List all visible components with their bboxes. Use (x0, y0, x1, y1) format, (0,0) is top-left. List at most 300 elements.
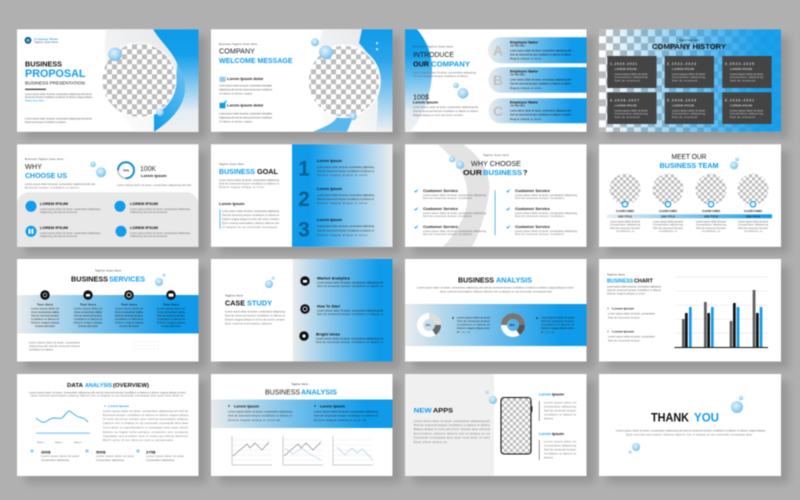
stat: 100$ (413, 94, 429, 101)
bar chart (674, 277, 768, 348)
service 3: Ut enim ad minim (119, 324, 140, 328)
goal 3: Lorem Ipsum (317, 218, 342, 222)
member 4: Incididunt ut (744, 229, 762, 233)
member 1: Sed do eiusmod tempor (610, 226, 640, 230)
member 3: CLAUDE CAINES (702, 210, 720, 213)
heading (607, 272, 662, 296)
heading: BUSINESS (265, 390, 300, 397)
item 1: Sed do eiusmod tempor (544, 408, 576, 412)
heading: BUSINESS (458, 278, 494, 284)
right list: Lorem ipsum dolor sit amet, consectetur adipiscing (515, 193, 578, 197)
heading: COMPANY (219, 48, 255, 55)
stat 100K: Lorem Ipsum (141, 174, 167, 178)
service 1 (31, 290, 60, 328)
heading: WELCOME MESSAGE (219, 58, 293, 65)
heading (414, 408, 490, 444)
heading: Sed do eiusmod tempor incididunt ut labore et dolore (414, 423, 490, 427)
item: market analytics: Market Analytics (317, 276, 350, 280)
text block: Eiusmod tempor incididunt ut labore (25, 120, 66, 124)
heading: APPS (433, 408, 454, 414)
stat 3 (136, 450, 184, 462)
left list (414, 189, 486, 236)
icon: spheres (108, 48, 164, 116)
heading (463, 153, 528, 177)
heading: CASE (225, 298, 245, 308)
heading: CHART (634, 278, 654, 284)
line chart (36, 411, 90, 444)
goal 2: Lorem ipsum dolor sit amet, consectetur adipiscing (317, 193, 374, 197)
employee row A (488, 37, 586, 63)
service 3: Lorem ipsum dolor sit (115, 306, 143, 310)
heading: Dolore magna aliqua ut enim (219, 185, 265, 189)
text block (25, 92, 92, 124)
heading: Commodo consequat duis aute irure dolor in velit (414, 436, 490, 440)
item 1: Lorem Ipsum dolor (227, 77, 264, 81)
heading: BUSINESS (219, 169, 255, 176)
box 2020: LOREM IPSUM (614, 67, 637, 71)
service 1: Sed do eiusmod tempor (31, 314, 59, 318)
right list: Sed do eiusmod tempor incididunt (515, 214, 564, 218)
heading: Magna aliqua ut enim ad minim veniam quis nostrud (414, 427, 490, 431)
point 2: Sed do eiusmod tempor incididunt ut labore et (314, 414, 378, 418)
blue divider (494, 190, 496, 235)
service 1: Incididunt ut labore et (31, 317, 59, 321)
text block (29, 340, 80, 352)
donut 2 (504, 316, 522, 334)
box 2030: Lorem ipsum dolor sit amet (730, 108, 763, 112)
stat (413, 94, 478, 117)
stat: Sed do eiusmod tempor incididunt ut labore et dolore (413, 109, 478, 113)
text block (103, 404, 189, 442)
box 2022: 2.2022-2023 (667, 62, 696, 66)
heading (417, 278, 575, 294)
logo: Tagline Goes Here (34, 40, 59, 44)
item 1: Lorem ipsum dolor sit (544, 400, 576, 404)
line chart: Series 2 (55, 442, 63, 444)
member 2: Sed do eiusmod tempor (653, 226, 683, 230)
icon: spheres (311, 38, 378, 120)
point 1: Sed do eiusmod tempor incididunt ut labore et (228, 414, 292, 418)
service 4: Ut enim ad minim (161, 324, 182, 328)
goal 2: Dolore magna aliqua ut enim (317, 201, 368, 205)
list item 3: Lorem ipsum dolor sit amet, consectetur adipiscing (40, 231, 100, 235)
service 1: Text Here (37, 302, 53, 306)
text block: Dolore eu fugiat nulla pariatur excepteur sint occaecat (103, 430, 188, 434)
heading: Lorem ipsum dolor sit amet, consectetur adipiscing (219, 178, 280, 182)
box 2028 (665, 92, 714, 124)
text block: Read more here (25, 98, 44, 102)
list item 2 (114, 201, 190, 214)
employee row A: Employee Name (510, 41, 538, 45)
box 2020 (607, 56, 657, 88)
box 2026: 4.2026-2027 (610, 98, 639, 102)
phone mockup (501, 398, 532, 454)
bullet 2: Lorem Ipsum (612, 330, 634, 334)
item 2: Lorem ipsum dolor sit (544, 440, 576, 444)
decorative left shape (405, 29, 432, 132)
box 2022: LOREM IPSUM (672, 67, 694, 71)
list item 3 (26, 226, 100, 238)
donut 75%: 75% (123, 169, 129, 173)
service 2: Sed do eiusmod tempor (74, 314, 102, 318)
text block: Irure dolor in reprehenderit in voluptate velit esse cillum (103, 426, 189, 430)
logo (25, 37, 59, 44)
heading (29, 383, 187, 398)
gradient band (17, 295, 198, 334)
service 3: Incididunt ut labore et (115, 317, 143, 321)
point 2: Lorem ipsum dolor sit amet, consectetur adipiscing (314, 410, 378, 414)
member 1: Consectetur adipiscing (610, 223, 640, 227)
point 1: Lorem Ipsum (234, 404, 259, 408)
right list: Lorem ipsum dolor sit amet, consectetur adipiscing (515, 229, 578, 233)
bullet 2 (607, 330, 655, 342)
goal 3: Dolore magna aliqua ut enim (317, 233, 368, 237)
title: BUSINESS TEAM (660, 161, 718, 170)
goal 2: Sed do eiusmod tempor incididunt ut labore et (317, 197, 374, 201)
stat 100K (117, 166, 192, 187)
heading: ANALYSIS (85, 383, 112, 389)
heading: GOAL (257, 169, 279, 176)
box 2024 (722, 56, 772, 88)
item: how to start: How To Start (317, 304, 341, 308)
member 2: CLAUDE CAINES (659, 210, 677, 213)
box 2026 (607, 92, 657, 124)
box 2030: 6.2030-2031 (725, 98, 754, 102)
panel: slide 4 company history (599, 29, 789, 139)
title (25, 61, 86, 90)
item 2: Lorem ipsum dolor sit amet, consectetur elit adipis (219, 111, 273, 115)
employee row A: Job Title Here (510, 44, 526, 48)
service 1: Ut enim ad minim (35, 324, 56, 328)
employee row C: C (493, 103, 503, 119)
left list: Lorem ipsum dolor sit amet, consectetur adipiscing (423, 193, 486, 197)
heading: Tagline Here... (292, 382, 311, 386)
line chart 2 (283, 436, 323, 465)
list item 4 (116, 226, 190, 238)
dot grid (133, 342, 158, 349)
goal 2: 2 (298, 188, 310, 211)
line chart: Series 3 (74, 442, 82, 444)
employee row B: Employee Name (510, 69, 538, 73)
text block with blue rule: Ut aliquip ex ea commodo consequat (222, 225, 277, 229)
stat: Lorem ipsum dolor sit amet, consectetur adipiscing elit (413, 105, 478, 109)
box 2020: Lorem ipsum dolor sit amet (614, 72, 648, 76)
heading: Lorem ipsum dolor sit amet, consectetur adipiscing elit sed (25, 182, 96, 186)
heading: NEW (414, 408, 433, 414)
item 2: Lorem Ipsum dolor (227, 103, 264, 107)
employee row B: Job Title Here (510, 72, 526, 76)
decorative gray and blue waves (105, 29, 198, 132)
member 3: JOB TITLE (704, 216, 718, 218)
heading: Business Tagline Goes Here (413, 44, 454, 48)
left list: Sed do eiusmod tempor incididunt (423, 232, 472, 236)
gradient side panel (293, 259, 392, 362)
service 2: Amet consectetur adipis (74, 310, 103, 314)
text 2 (536, 316, 575, 334)
goal 1: Lorem Ipsum (317, 159, 342, 163)
heading (265, 382, 337, 397)
item 1: Incididunt ut labore et (544, 412, 576, 416)
title: PROPOSAL (25, 68, 86, 80)
text block: Lorem ipsum dolor sit amet, consectetur adipiscing elit sed do (103, 409, 188, 413)
text 2: Incididunt ut labore et (541, 322, 574, 326)
text block: Lorem ipsum dolor sit amet, consectetur adipiscing elit sed do (25, 116, 92, 120)
text 1: Lorem ipsum dolor sit amet (457, 316, 490, 320)
heading (219, 162, 280, 189)
heading: OUR (463, 168, 483, 177)
heading: DATA (67, 383, 83, 389)
stat 1: Consectetur adipiscing (41, 458, 70, 462)
box 2020: Sed do eiusmod (614, 78, 640, 82)
list item 2: Adipiscing elit sed do eiusmod (130, 210, 168, 214)
right list: Sed do eiusmod tempor incididunt (515, 232, 564, 236)
stat 3: 275$ (146, 450, 156, 454)
employee row B (488, 67, 586, 93)
right list: Customer Service (515, 225, 550, 229)
heading: Lorem ipsum dolor sit amet, consectetur adipiscing (607, 284, 662, 288)
box 2026: Lorem ipsum dolor sit amet (614, 108, 648, 112)
box 2022: Sed do eiusmod (672, 78, 698, 82)
heading: WHY (25, 164, 42, 171)
heading: Quis nostrud exercitation ullamco laboris nisi ut aliquip ex ea commodo consequat duis (440, 290, 553, 294)
panel: slide 7 why choose our business (405, 144, 594, 254)
member 4 (738, 174, 768, 233)
left list: Customer Service (423, 189, 458, 193)
item: how to start (300, 304, 383, 316)
item 2: Lorem (539, 432, 551, 436)
text block (616, 428, 766, 436)
text 2: Lorem ipsum dolor sit amet (541, 316, 574, 320)
panel: slide 5 why choose us (17, 144, 206, 254)
heading: Quis nostrud exercitation ullamco (225, 322, 272, 326)
photo placeholder circle (102, 43, 176, 117)
stat 2 (86, 450, 134, 462)
box 2022: Lorem ipsum dolor sit amet (672, 72, 705, 76)
goal 1: Sed do eiusmod tempor incididunt ut labore et (317, 169, 374, 173)
item: how to start: Sed do eiusmod tempor incididunt ut labore et (317, 312, 383, 316)
right list: Customer Service (515, 189, 550, 193)
text block: Eiusmod tempor incididunt ut labore et dolore magna aliqua (103, 413, 188, 417)
member 4: Sed do eiusmod tempor (738, 226, 768, 230)
service 1: Dolore magna aliqua (31, 320, 60, 324)
member 1: Incididunt ut (616, 229, 634, 233)
service 2: Dolore magna aliqua (74, 320, 102, 324)
right list: Customer Service (515, 207, 550, 211)
heading: Quis nostrud exercitation ullamco laboris nisi ut aliquip ex ea commodo consequat duis aute irure dolor in (31, 394, 183, 398)
title: Tagline Goes Here (95, 268, 122, 272)
list item 3: Adipiscing elit sed do eiusmod (40, 234, 78, 238)
line chart 1 (232, 436, 272, 465)
item 2: Ipsum (552, 432, 564, 436)
point 2: Lorem Ipsum (320, 404, 345, 408)
heading: Sed do eiusmod tempor incididunt ut labore et (219, 181, 279, 185)
employee row C: Employee Name (510, 100, 538, 104)
item: market analytics: Sed do eiusmod tempor incididunt ut labore et (317, 284, 383, 288)
employee row B: Sed do eiusmod tempor incididunt ut labore et dolore (510, 81, 572, 85)
heading: BUSINESS (483, 168, 522, 177)
stat 3: Lorem ipsum dolor sit amet (146, 454, 184, 458)
gray panel (17, 192, 198, 247)
item 2: Sed do eiusmod tempor (544, 448, 576, 452)
goal 3 (298, 218, 374, 241)
employee row C: Magna aliqua ut enim (510, 117, 541, 121)
right list: Sed do eiusmod tempor incididunt (515, 196, 564, 200)
line chart: Series 1 (37, 442, 45, 444)
heading: Lorem ipsum dolor sit amet, consectetur adipiscing elit (414, 419, 490, 423)
bullet 2: Lorem ipsum dolor sit amet, consectetur (608, 334, 655, 338)
photo placeholder circle (308, 45, 380, 117)
member 4: Lorem ipsum dolor sit amet (738, 219, 768, 223)
box 2028: Lorem ipsum dolor sit amet (672, 108, 705, 112)
icon: spheres (155, 274, 166, 286)
list item 2: Lorem ipsum dolor sit amet, consectetur adipiscing (130, 207, 190, 211)
service 4: Sed do eiusmod tempor (157, 314, 185, 318)
box 2022: Consectetur adipiscing (672, 75, 706, 79)
employee row B: Lorem ipsum dolor sit amet, consectetur adipiscing elit (510, 77, 571, 81)
title (71, 268, 145, 284)
text block: Lorem ipsum dolor sit amet, consectetur adipiscing elit sed do eiusmod tempor incididunt ut labore et dolore magna aliqua (616, 428, 766, 432)
member 1: JOB TITLE (618, 216, 632, 218)
employee row C (488, 98, 586, 123)
item: bright ideas: Lorem ipsum dolor sit amet, consectetur adipiscing elit (316, 336, 383, 340)
stat 1 (30, 450, 79, 462)
panel: slide 13 data analysis (17, 374, 206, 483)
icon: spheres (730, 158, 739, 169)
heading: Tagline Goes Here (483, 153, 510, 157)
donut 2: 60% (510, 324, 515, 327)
box 2024: Sed do eiusmod (730, 78, 756, 82)
member 2: Incididunt ut (659, 229, 677, 233)
employee row A: Lorem ipsum dolor sit amet, consectetur adipiscing elit (510, 48, 571, 52)
bullet 1 (607, 306, 655, 320)
text block: Laboris nisi ut aliquip ex ea commodo consequat duis aute (103, 421, 188, 425)
goal 3: Sed do eiusmod tempor incididunt ut labore et (317, 228, 374, 232)
heading (225, 294, 286, 326)
heading: Dolore magna aliqua ut enim (607, 292, 646, 296)
text block with blue rule: Sed do eiusmod tempor incididunt ut labore et (222, 213, 279, 217)
member 2: JOB TITLE (661, 216, 675, 218)
box 2024: 3.2024-2025 (725, 62, 754, 66)
point 2 (314, 404, 378, 422)
heading: WHY CHOOSE (471, 159, 521, 168)
icon: spheres (453, 82, 468, 99)
title: BUSINESS PRESENTATION (25, 80, 85, 85)
member 3: Sed do eiusmod tempor (696, 226, 726, 230)
heading: Dolore magna aliqua ut enim ad minim veniam (225, 318, 286, 322)
heading: Lorem ipsum dolor sit amet, consectetur adipiscing (225, 310, 286, 314)
point 1 (228, 404, 292, 422)
heading: Sed do eiusmod tempor incididunt ut labore et (225, 314, 285, 318)
box 2026: Sed do eiusmod (614, 115, 640, 119)
stat 2: Consectetur adipiscing (96, 458, 124, 462)
service 4: Dolore magna aliqua (157, 320, 186, 324)
goal 2: Lorem Ipsum (317, 187, 342, 191)
goal 3: 3 (298, 218, 310, 241)
text 2: Minim (541, 330, 555, 334)
item: market analytics: Lorem ipsum dolor sit amet, consectetur adipiscing elit (317, 280, 383, 284)
service 4: Lorem ipsum dolor sit (157, 306, 185, 310)
service 2 (74, 290, 103, 328)
icon: spheres (628, 396, 743, 454)
service 3 (115, 290, 144, 328)
left list: Customer Service (423, 225, 458, 229)
member 3: Incididunt ut (702, 229, 720, 233)
text block with blue rule: Dolore magna aliqua ut enim ad minim veniam (222, 217, 280, 221)
heading: Tagline Here (607, 272, 626, 276)
box 2026: LOREM IPSUM (614, 103, 637, 107)
member 1: CLAUDE CAINES (616, 210, 634, 213)
title: BUSINESS (25, 61, 62, 68)
member 4: Consectetur adipiscing (738, 223, 768, 227)
list item 4: Lorem ipsum dolor sit amet, consectetur adipiscing (130, 231, 190, 235)
panel: slide 9 business services (17, 259, 206, 368)
list item 4: LOREM IPSUM (130, 226, 158, 230)
heading: ANALYSIS (496, 278, 532, 284)
service 2: Incididunt ut labore et (74, 317, 102, 321)
heading (25, 157, 96, 189)
item 2: Incididunt ut labore et (544, 452, 576, 456)
member 2: Consectetur adipiscing (653, 223, 684, 227)
text block: Ut enim ad minim veniam quis nostrud exercitation ullamco (103, 417, 188, 421)
list item 1: LOREM IPSUM (40, 202, 68, 206)
heading: Tagline Goes Here (219, 162, 245, 166)
service 4: Amet consectetur adipis (157, 310, 186, 314)
employee row A: Magna aliqua ut enim (510, 56, 541, 60)
panel: slide 14 business analysis charts (211, 374, 400, 483)
employee row C: Job Title Here (510, 104, 526, 108)
heading: Sed do eiusmod tempor incididunt ut labore (607, 288, 662, 292)
decorative shapes (313, 29, 392, 132)
box 2022 (665, 56, 714, 88)
text block with blue rule: Quis nostrud exercitation ullamco laboris nisi (222, 221, 279, 225)
box 2030 (722, 92, 772, 124)
panel: slide 2 welcome message (211, 29, 400, 139)
text block with blue rule: Lorem ipsum dolor sit amet, consectetur adipiscing (222, 209, 280, 213)
text block: Adipiscing elit sed do eiusmod tempor (29, 344, 80, 348)
goal 1 (298, 157, 374, 180)
icon: spheres (90, 162, 106, 177)
title (652, 38, 726, 51)
item 2: Adipiscing elit sed do eiusmod tempor incididunt (219, 115, 272, 119)
service 4: Incididunt ut labore et (157, 317, 185, 321)
service 1: Lorem ipsum dolor sit (31, 306, 59, 310)
text 1: Dolore magna aliqua enim (457, 326, 491, 330)
box 2024: Lorem ipsum dolor sit amet (730, 72, 763, 76)
service 3: Sed do eiusmod tempor (115, 314, 143, 318)
service 2: Text Here (80, 302, 96, 306)
employee row A: Sed do eiusmod tempor incididunt ut labore et dolore (510, 52, 572, 56)
stat: Magna aliqua ut enim ad minim veniam (413, 113, 464, 117)
text block: Lorem ipsum dolor sit amet, consectetur adipiscing elit sed do (25, 92, 92, 96)
item 1: Consectetur adipiscing (544, 404, 576, 408)
box 2024: LOREM IPSUM (730, 67, 752, 71)
line chart 3 (333, 436, 373, 465)
text 1: Sed do eiusmod tempor (457, 319, 490, 323)
heading: Esse cillum dolore eu (414, 440, 447, 444)
panel: slide 1 business proposal (17, 29, 206, 139)
title (660, 152, 718, 170)
heading (219, 42, 293, 65)
service 4 (157, 290, 186, 328)
title: BUSINESS (71, 276, 108, 284)
text 1: Incididunt ut labore et (457, 322, 490, 326)
text block: Cupidatat non proident sunt in culpa qui officia deserunt (103, 434, 188, 438)
point 1: Dolore magna aliqua ut enim ad (228, 418, 280, 422)
text block: Lorem ipsum dolor sit amet, consectetur (29, 340, 80, 344)
text block with blue rule (219, 202, 280, 229)
heading: CHOOSE US (25, 173, 67, 180)
heading: Lorem ipsum dolor sit amet, consectetur adipiscing elit sed do eiusmod tempor incididunt ut labore et dolore magna aliqua ut enim (29, 390, 187, 394)
